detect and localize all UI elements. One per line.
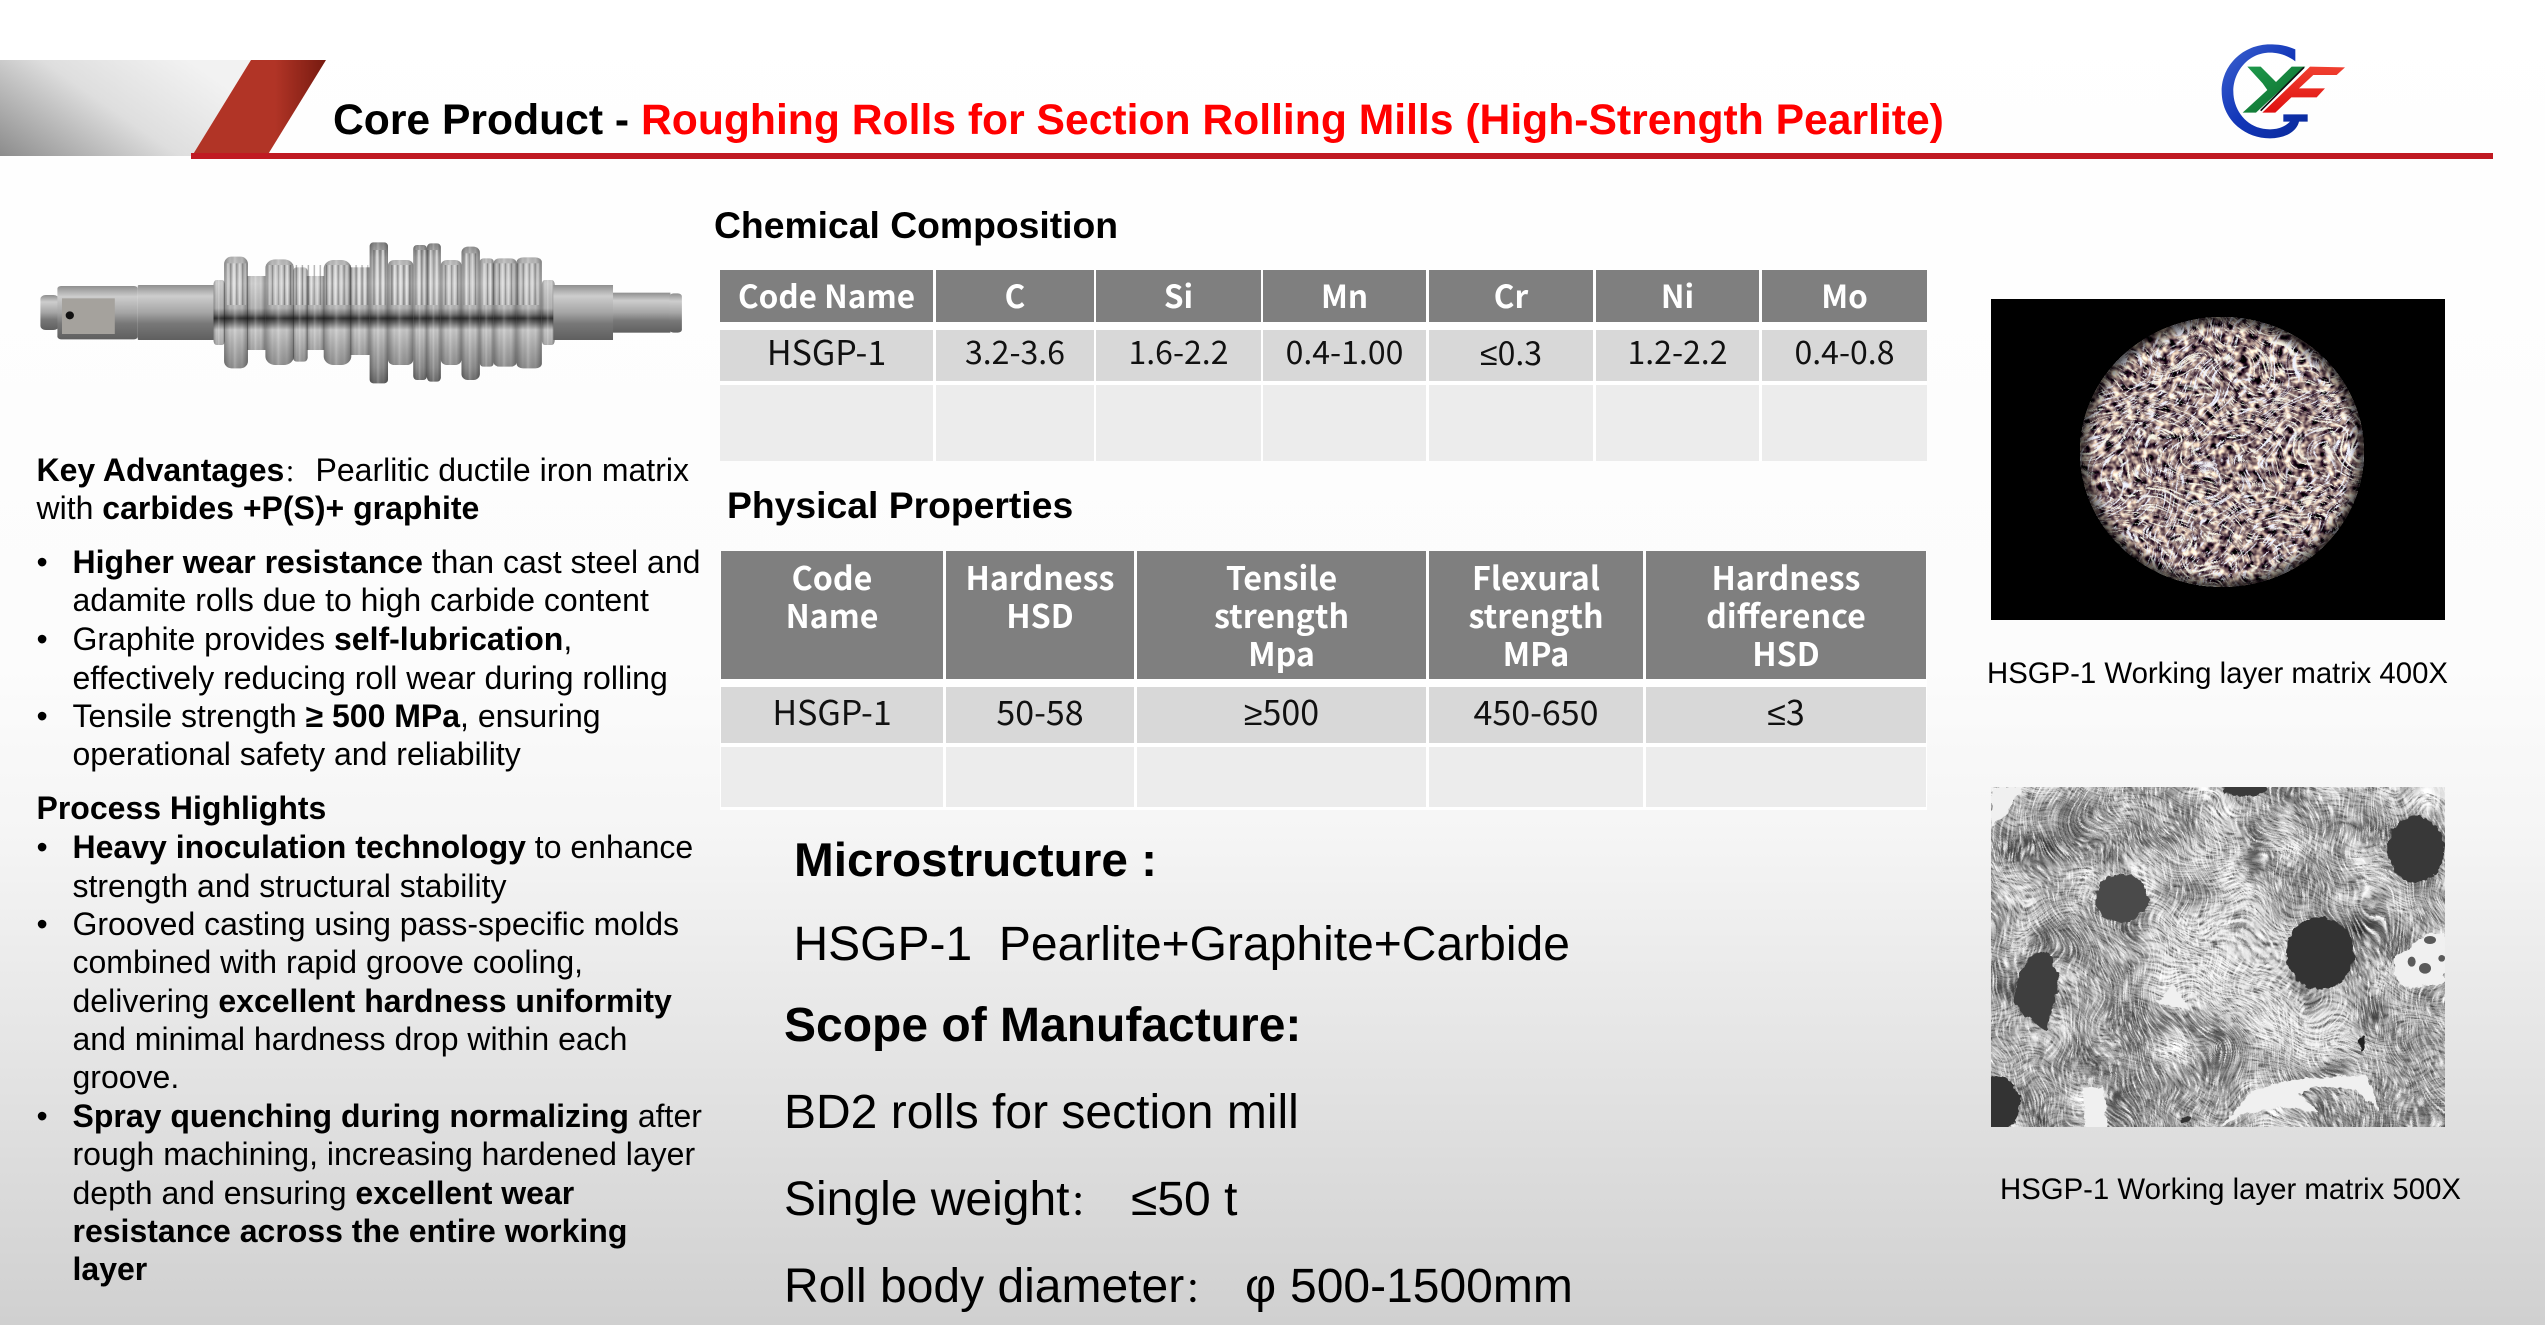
text: grooved casting: Grooved casting using pass-specific molds: [72, 906, 679, 942]
heading: scope of manufacture: Scope of Manufacture:: [784, 998, 1301, 1052]
header banner: [0, 60, 2493, 159]
text: microstructure value: HSGP-1 Pearlite+Graphite+Carbide: [794, 918, 1570, 971]
icon: company logo: [2222, 44, 2345, 138]
table: chemical composition: ≤0.3: [1480, 329, 1542, 375]
table: chemical composition: Mo: [1821, 272, 1868, 318]
bullet: grooved casting: •: [36, 906, 48, 942]
table: physical properties: 450-650: [1473, 686, 1599, 735]
text: roll body diameter: Roll body diameter：: [784, 1260, 1219, 1313]
text: spray quenching line 4: resistance across the entire working: [72, 1212, 627, 1248]
text: grooved casting line 3: delivering excellent hardness uniformity: [72, 982, 672, 1018]
text: roll body diameter: [784, 1260, 1573, 1313]
bullet 1: •: [36, 544, 48, 580]
image: roll product photo: [40, 242, 682, 384]
table: chemical composition: 0.4-1.00: [1286, 328, 1403, 374]
text: self-lubrication: Graphite provides self-lubrication,: [72, 620, 572, 656]
text: single weight: Single weight：: [784, 1172, 1104, 1226]
bullet: inoculation: •: [36, 828, 48, 864]
text: grooved casting line 4: and minimal hardness drop within each: [72, 1020, 627, 1056]
text: matrix description: with carbides +P(S)+ graphite: [36, 490, 479, 526]
text: scope: BD2 rolls for section mill: [784, 1086, 1299, 1138]
heading: microstructure: Microstructure :: [794, 834, 1157, 887]
table: chemical composition: 1.2-2.2: [1628, 328, 1727, 374]
table: physical properties: MPa: [1503, 630, 1569, 676]
table: physical properties: strength: [1468, 592, 1604, 638]
image: 500X micrograph: [1991, 787, 2445, 1127]
panel: key advantages: Pearlitic ductile iron matrix: [316, 452, 689, 488]
table: physical properties: strength: [1214, 592, 1349, 638]
text: inoculation: Heavy inoculation technology to enhance: [72, 828, 693, 864]
text: inoculation continued: strength and structural stability: [72, 868, 506, 904]
text: spray quenching line 2: rough machining, increasing hardened layer: [72, 1136, 695, 1172]
text: tensile strength: Tensile strength ≥ 500 MPa, ensuring: [72, 698, 601, 734]
text: tensile strength continued: operational safety and reliability: [72, 736, 521, 772]
panel: process highlights: [36, 790, 702, 1286]
heading: chemical composition: Chemical Composition: [714, 204, 1118, 246]
image: 400X micrograph: [1991, 299, 2445, 620]
table: physical properties: ≤3: [1767, 686, 1805, 735]
table: chemical composition: Mn: [1321, 272, 1368, 318]
table: physical properties: Hardness: [1712, 554, 1860, 600]
table: physical properties: 50-58: [996, 686, 1084, 735]
table: chemical composition: Si: [1164, 272, 1193, 318]
heading: physical properties: Physical Properties: [727, 484, 1073, 526]
table: physical properties: Flexural: [1472, 554, 1600, 600]
table: chemical composition: 0.4-0.8: [1795, 328, 1894, 374]
table: chemical composition: 3.2-3.6: [965, 328, 1065, 374]
table: chemical composition: Cr: [1494, 272, 1528, 318]
table: physical properties: Hardness: [966, 554, 1114, 600]
text: spray quenching line 3: depth and ensuring excellent wear: [72, 1174, 574, 1210]
table: chemical composition: [720, 270, 1927, 461]
heading: key advantages: Key Advantages：: [36, 452, 307, 488]
bullet 2: •: [36, 620, 48, 656]
text: higher wear resistance continued: adamite rolls due to high carbide content: [72, 582, 649, 618]
text: roll body diameter: φ: [1245, 1260, 1276, 1313]
table: chemical composition: 1.6-2.2: [1129, 328, 1228, 374]
panel: key advantages: [36, 452, 700, 772]
table: chemical composition: HSGP-1: [767, 326, 886, 375]
table: chemical composition: Code Name: [738, 272, 915, 318]
text: spray quenching: Spray quenching during normalizing after: [72, 1098, 702, 1134]
text: self-lubrication continued: effectively reducing roll wear during rolling: [72, 660, 668, 696]
table: chemical composition: C: [1005, 272, 1025, 318]
title: Core Product - Roughing Rolls for Section Rolling Mills (High-Strength Pearlite): [333, 96, 1944, 144]
caption: 500X: HSGP-1 Working layer matrix 500X: [2000, 1172, 2461, 1206]
table: physical properties: [720, 551, 1927, 810]
text: higher wear resistance: Higher wear resistance than cast steel and: [72, 544, 700, 580]
table: physical properties: difference: [1706, 592, 1866, 638]
text: roll body diameter: 500-1500mm: [1290, 1260, 1573, 1313]
heading: key advantages: [36, 452, 689, 488]
text: spray quenching line 5: layer: [72, 1250, 147, 1286]
text: ≤50 t: [1131, 1172, 1237, 1226]
table: physical properties: ≥500: [1244, 686, 1319, 735]
caption: 400X: HSGP-1 Working layer matrix 400X: [1987, 656, 2448, 690]
table: physical properties: Code: [792, 554, 872, 600]
table: chemical composition: Ni: [1661, 272, 1694, 318]
table: physical properties: HSGP-1: [772, 686, 892, 735]
table: physical properties: Name: [786, 592, 878, 638]
text: grooved casting line 5: groove.: [72, 1058, 179, 1094]
bullet: spray quenching: •: [36, 1098, 48, 1134]
table: physical properties: HSD: [1752, 630, 1820, 676]
table: physical properties: HSD: [1006, 592, 1074, 638]
text: grooved casting line 2: combined with rapid groove cooling,: [72, 944, 583, 980]
heading: process highlights: Process Highlights: [36, 790, 326, 826]
table: physical properties: Mpa: [1248, 630, 1315, 676]
bullet 3: •: [36, 698, 48, 734]
table: physical properties: Tensile: [1226, 554, 1337, 600]
